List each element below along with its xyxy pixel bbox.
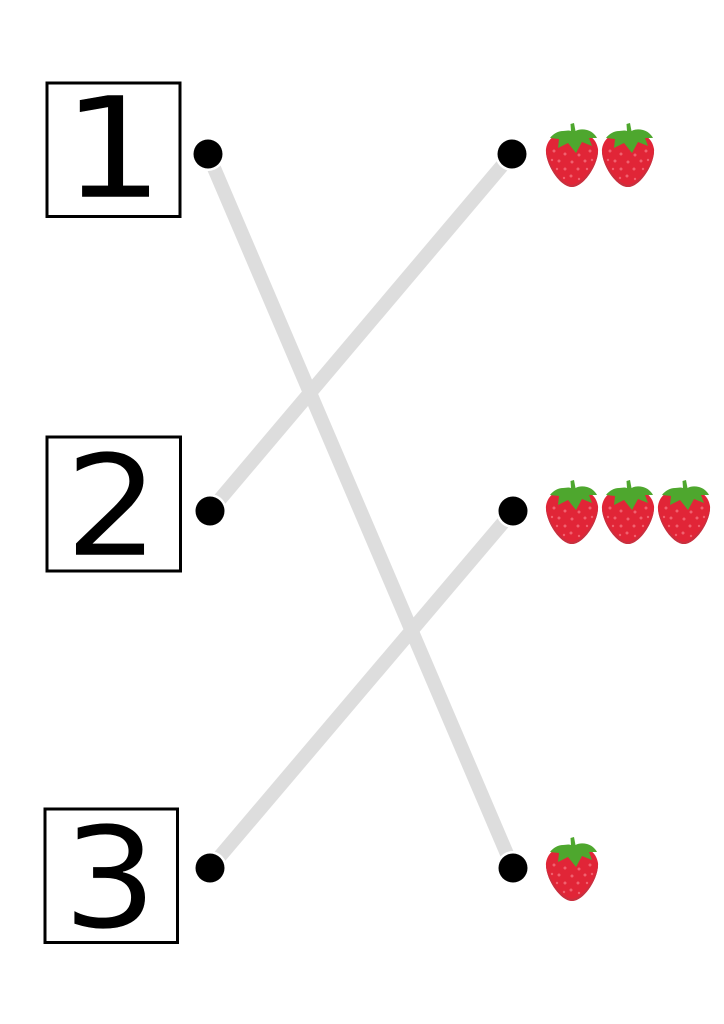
right dot 1 (498, 140, 526, 168)
right dot 2 (498, 496, 528, 526)
icon: two strawberries (546, 123, 654, 187)
number box 1: 1 (62, 67, 164, 230)
left dot 3 (196, 854, 224, 882)
answer line: 2 to two strawberries (210, 154, 512, 511)
left dot 2 (196, 496, 224, 526)
icon: three strawberries (546, 480, 710, 544)
right dot 3 (498, 854, 528, 882)
icon: one strawberry (546, 837, 598, 901)
answer line: 3 to three strawberries (210, 511, 513, 868)
number box 3: 3 (63, 798, 157, 961)
left dot 1 (194, 140, 222, 168)
answer line: 1 to one strawberry (208, 154, 513, 868)
number box 2: 2 (65, 426, 159, 589)
